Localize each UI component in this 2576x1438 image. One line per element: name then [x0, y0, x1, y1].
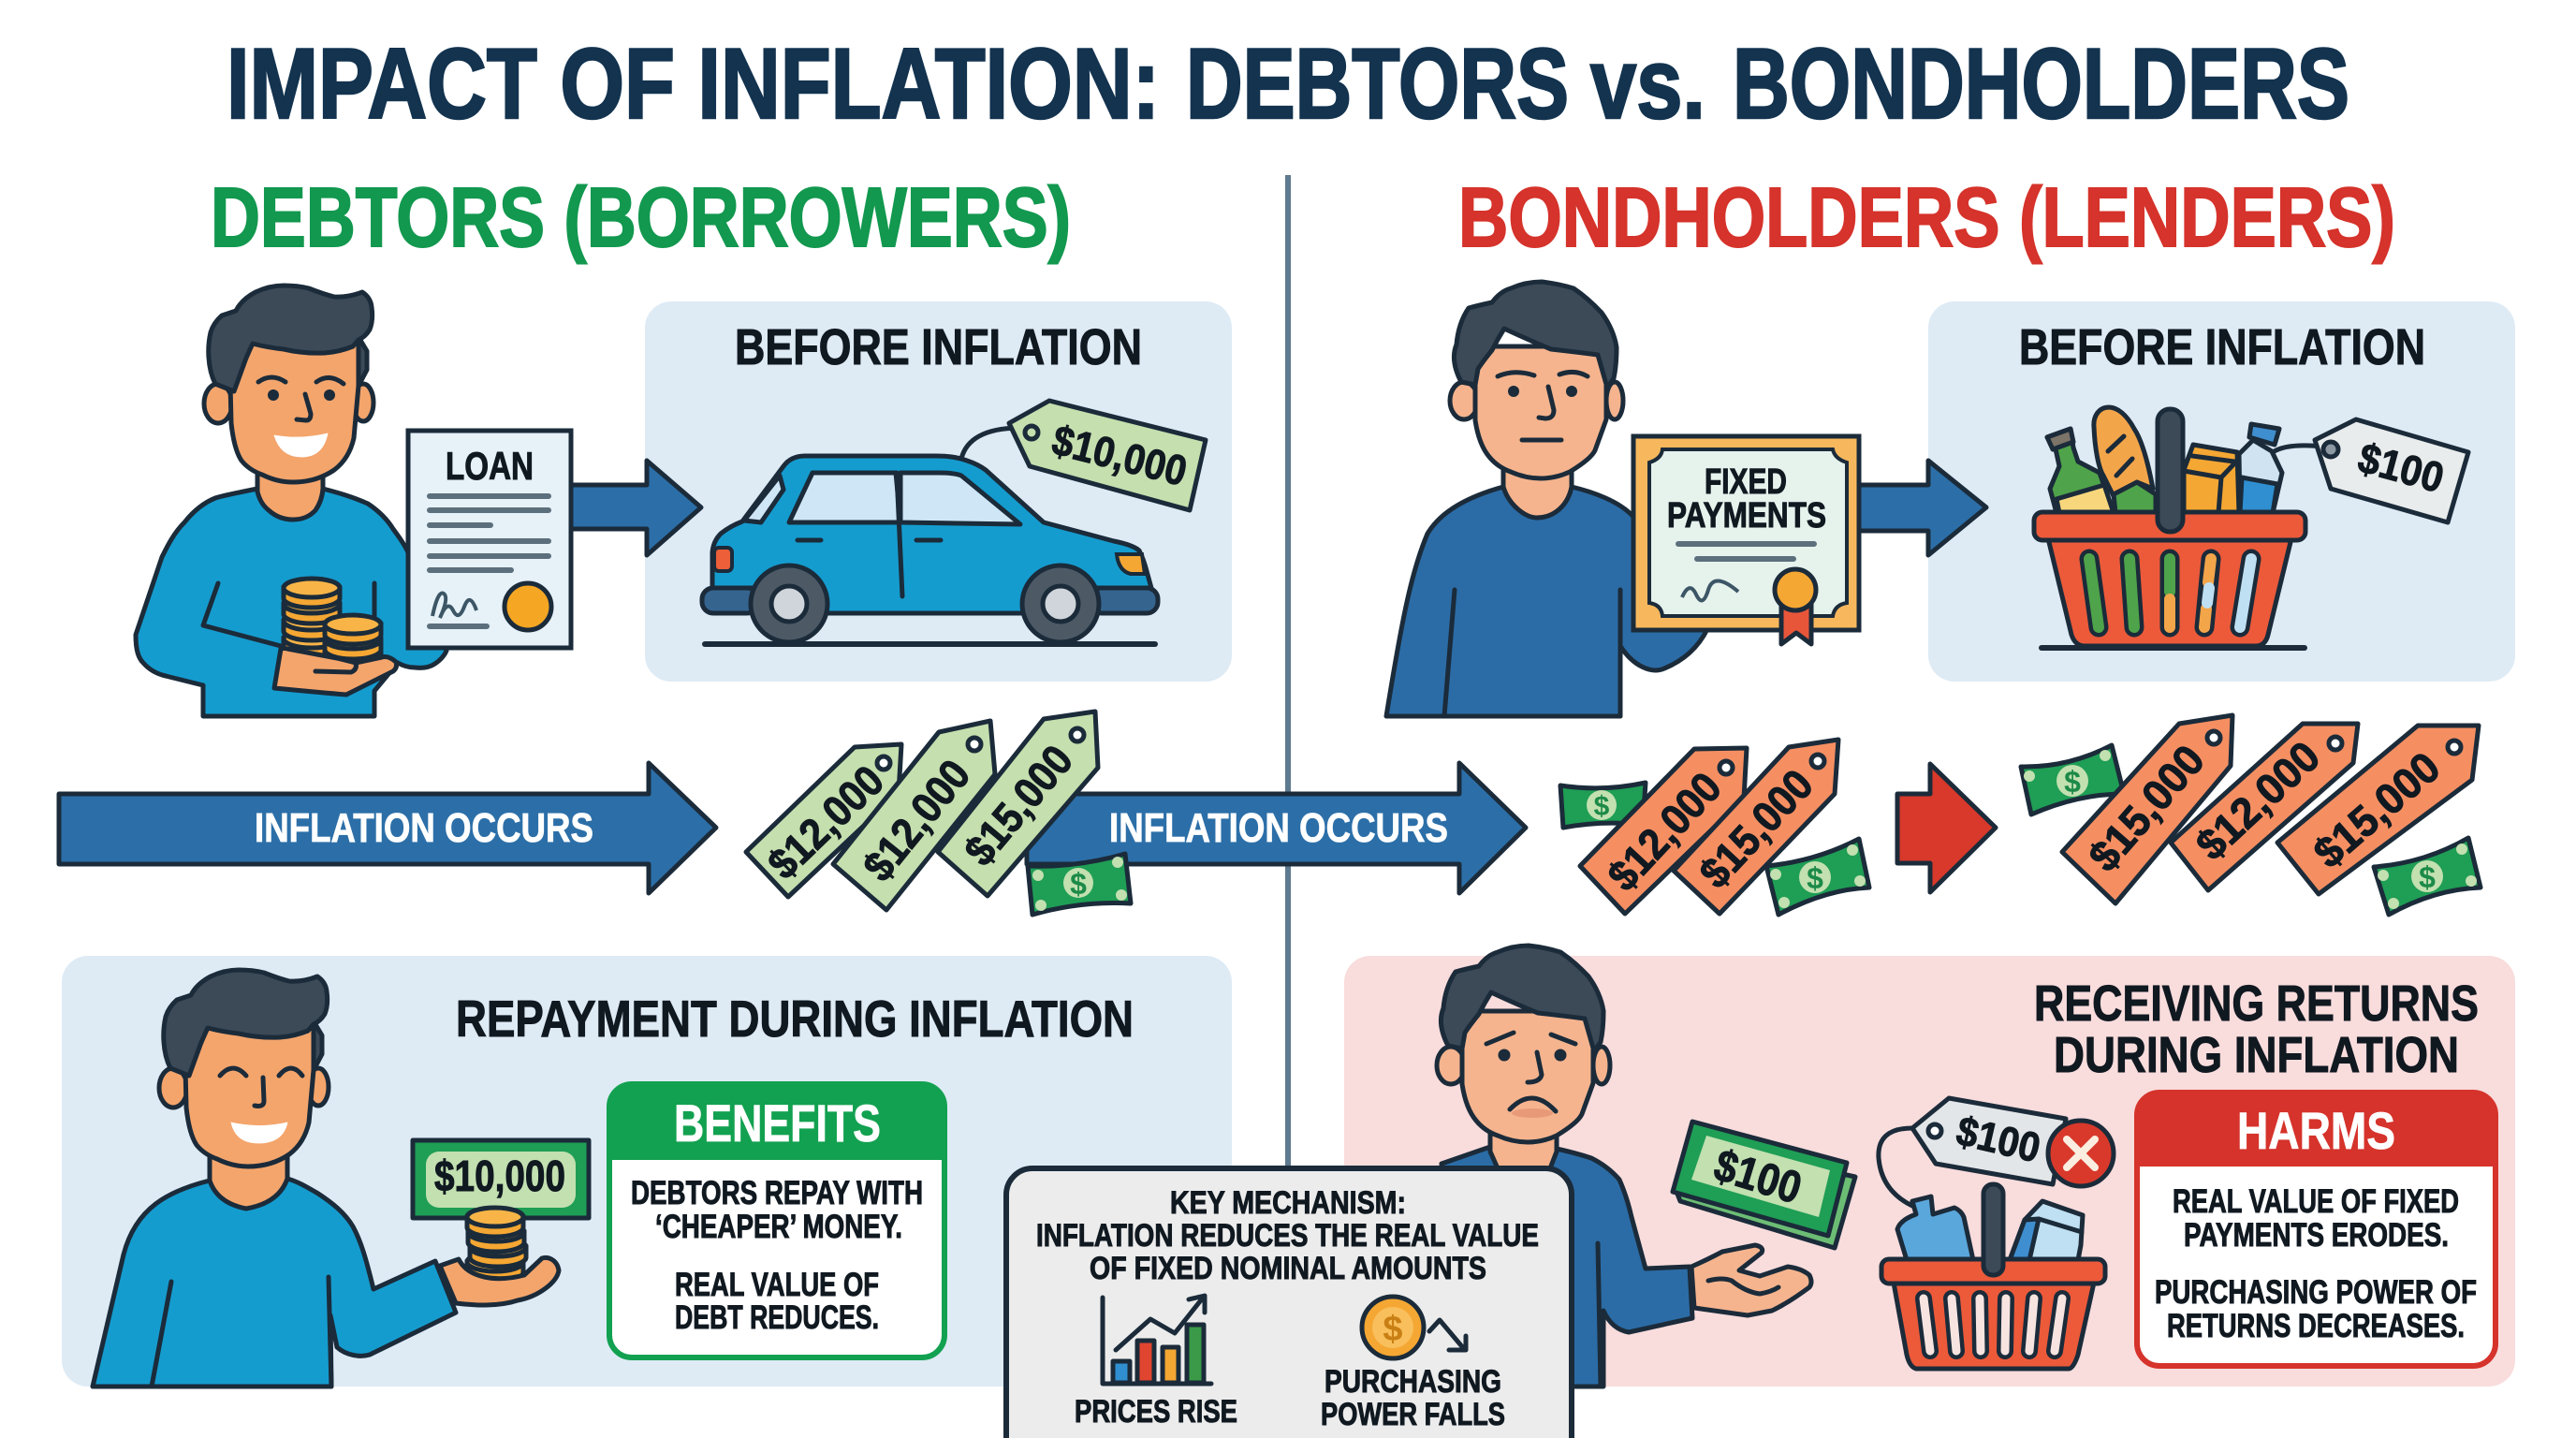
- icon: price tag $100: $100: [2353, 433, 2449, 502]
- icon: coins in hand: [274, 579, 397, 695]
- icon: falling coin: [1362, 1297, 1466, 1358]
- face: smiling: [159, 970, 329, 1167]
- panel: bondholder before inflation: [1928, 301, 2515, 682]
- icon: grocery basket: [2034, 407, 2307, 651]
- tag: $15,000 first: [2062, 715, 2232, 903]
- tag: $12,000 first: $12,000: [758, 756, 893, 888]
- icon: price tag $100 rejected: $100: [1953, 1108, 2044, 1171]
- label: prices rise: PRICES RISE: [1075, 1394, 1237, 1430]
- text: harms copy: PURCHASING POWER OF: [2155, 1274, 2477, 1311]
- tag: $15,000: $15,000: [1690, 760, 1822, 897]
- icon: loan document: [408, 431, 571, 648]
- tag: $12,000: $12,000: [2187, 731, 2329, 870]
- figure: happy borrower holding loan: [136, 286, 446, 716]
- title: DEBTORS: [1186, 27, 1569, 139]
- text: benefits copy: ‘CHEAPER’ MONEY.: [655, 1209, 902, 1245]
- arrow: inflation occurs left: [59, 763, 716, 893]
- icon: dollar bill: $: [2419, 860, 2436, 894]
- icon: dollar bill: [1028, 854, 1131, 915]
- icon: dollar bill: $: [2064, 765, 2081, 799]
- panel: repayment during inflation: [62, 956, 1232, 1387]
- text: benefits copy: REAL VALUE OF: [675, 1267, 879, 1303]
- title: IMPACT OF INFLATION:: [227, 27, 1160, 139]
- text: benefits copy: DEBT REDUCES.: [675, 1299, 879, 1336]
- icon: price tag $10,000: [961, 401, 1206, 510]
- arrow: loan to car: [571, 461, 701, 555]
- label: fixed payments: FIXED: [1705, 462, 1787, 502]
- title: BONDHOLDERS: [1733, 27, 2349, 139]
- tags: orange rising prices second group: [2021, 715, 2481, 915]
- tags: orange rising prices first group: [1560, 740, 1869, 915]
- text: key mechanism: KEY MECHANISM:: [1170, 1185, 1406, 1221]
- arrow: inflation occurs right: [1027, 763, 1526, 893]
- icon: dollar bill: $: [1594, 791, 1610, 822]
- tag: $12,000 second: [833, 721, 995, 910]
- text: harms copy: REAL VALUE OF FIXED: [2173, 1183, 2459, 1220]
- tag: $15,000 first: $15,000: [2079, 736, 2214, 880]
- icon: $10,000 bill with coins: $10,000: [434, 1152, 565, 1200]
- text: harms copy: RETURNS DECREASES.: [2167, 1308, 2465, 1344]
- heading: debtors: DEBTORS (BORROWERS): [211, 171, 1071, 265]
- icon: fixed payments certificate: [1633, 436, 1859, 644]
- heading: repayment during inflation: REPAYMENT DURING INFLATION: [456, 990, 1134, 1048]
- heading: receiving returns: RECEIVING RETURNS: [2034, 976, 2479, 1032]
- arrow: inflation occurs left: INFLATION OCCURS: [255, 805, 593, 851]
- panel: debtor before inflation: [645, 301, 1232, 682]
- icon: price tag $100 rejected: [1879, 1098, 2114, 1206]
- tag: $12,000: $12,000: [1598, 763, 1731, 900]
- heading: receiving returns: DURING INFLATION: [2054, 1027, 2459, 1083]
- figure: smiling borrower: [93, 970, 456, 1387]
- text: key mechanism: OF FIXED NOMINAL AMOUNTS: [1090, 1251, 1486, 1286]
- icon: $100 bills: [1673, 1122, 1855, 1248]
- text: benefits copy: DEBTORS REPAY WITH: [631, 1175, 923, 1211]
- label: benefits: BENEFITS: [674, 1093, 881, 1152]
- tag: $12,000: [2171, 724, 2358, 890]
- card: benefits: [609, 1084, 944, 1357]
- tag: $12,000 second: $12,000: [854, 750, 979, 890]
- icon: price tag $100: [2273, 419, 2468, 522]
- label: loan: LOAN: [446, 444, 534, 488]
- icon: dollar bill: [2374, 838, 2481, 915]
- figure: sad bondholder: [1437, 946, 1811, 1387]
- icon: price tag $10,000: $10,000: [1047, 416, 1192, 495]
- tag: $15,000: $15,000: [955, 736, 1082, 874]
- icon: dollar bill: [2021, 745, 2124, 814]
- tags: green inflated prices: [746, 712, 1131, 915]
- text: harms copy: PAYMENTS ERODES.: [2184, 1217, 2449, 1254]
- title: vs.: [1590, 27, 1705, 139]
- arrow: inflation occurs right: INFLATION OCCURS: [1109, 805, 1448, 851]
- panel: key mechanism: [1006, 1168, 1572, 1438]
- icon: dollar bill: [1560, 783, 1646, 828]
- heading: before inflation: BEFORE INFLATION: [735, 319, 1142, 375]
- icon: dollar bill: $: [1070, 867, 1087, 901]
- label: fixed payments: PAYMENTS: [1667, 496, 1826, 536]
- arrow: red escalation: [1897, 764, 1996, 892]
- arrow: certificate to basket: [1859, 461, 1986, 555]
- icon: blue car: [702, 456, 1158, 647]
- panel: receiving returns during inflation: [1344, 946, 2515, 1387]
- heading: before inflation right: BEFORE INFLATION: [2019, 319, 2425, 375]
- icon: $10,000 bill with coins: [413, 1140, 589, 1305]
- tag: $15,000 second: [2277, 726, 2479, 894]
- icon: shrinking basket: [1881, 1184, 2105, 1369]
- tag: $15,000 second: $15,000: [2305, 742, 2449, 877]
- label: purchasing power falls: POWER FALLS: [1321, 1397, 1505, 1432]
- label: purchasing power falls: PURCHASING: [1325, 1364, 1501, 1400]
- icon: rising price chart: [1103, 1296, 1211, 1384]
- icon: falling coin: $: [1383, 1310, 1403, 1349]
- icon: dollar bill: $: [1807, 861, 1823, 895]
- icon: dollar bill: [1766, 839, 1869, 915]
- heading: bondholders: BONDHOLDERS (LENDERS): [1458, 171, 2395, 265]
- text: key mechanism: INFLATION REDUCES THE REAL VALUE: [1036, 1218, 1539, 1254]
- card: harms: [2137, 1093, 2496, 1366]
- figure: neutral bondholder with certificate: [1386, 282, 1707, 716]
- icon: $100 bills: $100: [1708, 1140, 1808, 1214]
- label: harms: HARMS: [2237, 1101, 2395, 1160]
